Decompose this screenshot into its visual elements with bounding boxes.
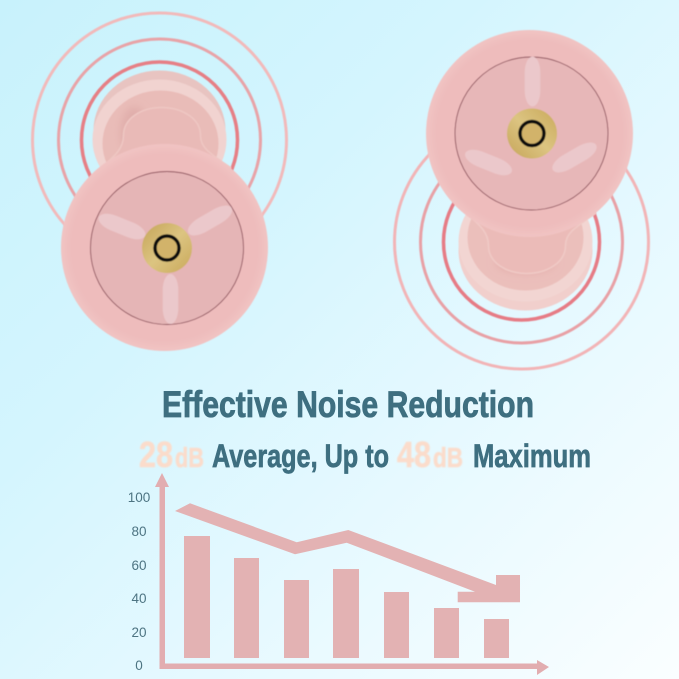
sound rings: right earplug bbox=[394, 115, 648, 369]
left earplug flange bbox=[92, 70, 226, 200]
text: average, up to: Average, Up to bbox=[212, 438, 389, 474]
right earplug flange bbox=[458, 182, 592, 310]
y-axis labels: 40 bbox=[131, 591, 147, 606]
subtitle bbox=[139, 434, 591, 475]
value: 48dB bbox=[397, 434, 463, 475]
y-axis labels: 60 bbox=[131, 558, 147, 573]
downward trend arrow bbox=[175, 503, 520, 602]
value: 48dB: 48 bbox=[397, 434, 431, 475]
value: 28dB: dB bbox=[175, 442, 204, 473]
value: 28dB: 28 bbox=[139, 434, 173, 475]
y-axis labels: 20 bbox=[131, 625, 147, 640]
left earplug disc bbox=[90, 172, 244, 324]
axes bbox=[155, 473, 549, 675]
bars bbox=[184, 536, 509, 658]
right earplug head bbox=[426, 30, 633, 237]
right earplug blades bbox=[462, 56, 600, 179]
right earplug stem bbox=[464, 184, 596, 274]
left earplug blades bbox=[96, 201, 236, 324]
y-axis labels: 80 bbox=[131, 524, 147, 539]
title: Effective Noise Reduction bbox=[162, 384, 534, 425]
text: maximum: Maximum bbox=[473, 438, 591, 474]
bar chart bbox=[128, 473, 549, 675]
y-axis labels bbox=[128, 490, 150, 673]
right earplug bbox=[426, 30, 633, 310]
right earplug gold vent bbox=[507, 108, 557, 158]
y-axis labels: 100 bbox=[128, 490, 150, 505]
right earplug disc bbox=[455, 57, 608, 210]
y-axis labels: 0 bbox=[135, 658, 143, 673]
sound rings: left earplug bbox=[32, 13, 286, 267]
left earplug stem bbox=[98, 108, 230, 198]
left earplug gold vent bbox=[142, 223, 192, 273]
value: 48dB: dB bbox=[433, 442, 463, 473]
left earplug bbox=[61, 70, 268, 351]
value: 28dB bbox=[139, 434, 204, 475]
left earplug head bbox=[61, 144, 268, 351]
